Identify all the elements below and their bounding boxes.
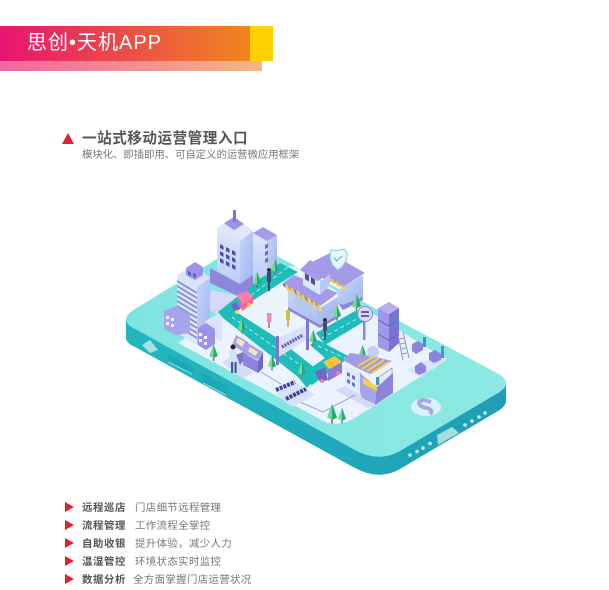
upper block: [303, 272, 320, 295]
item: humidity control: [65, 556, 221, 568]
awning stripes: [286, 285, 321, 311]
round sign: [358, 306, 372, 340]
road upper: [218, 263, 298, 318]
phone side slot left: [142, 340, 158, 353]
phone side: [126, 320, 506, 475]
item: data analysis: [65, 574, 252, 586]
road diagonal: [218, 308, 320, 388]
item: data analysis: 数据分析: [82, 575, 126, 586]
phone side recess 1: [168, 354, 194, 374]
trees: [209, 258, 366, 424]
kiosk two: [243, 343, 263, 360]
pink truck: [231, 291, 253, 314]
S logo badge: [411, 398, 441, 416]
yellow truck: [315, 356, 342, 383]
item: process management: 工作流程全掌控: [135, 521, 211, 532]
phone side port: [437, 427, 459, 445]
rear wing: [338, 275, 363, 308]
small people: [267, 268, 327, 340]
lavender plot pads: [204, 290, 378, 408]
header banner: [0, 26, 273, 71]
kiosk one: [232, 335, 248, 352]
tower building: [210, 210, 277, 296]
section heading: 一站式移动运营管理入口: [82, 131, 248, 147]
item: self checkout: 自助收银: [82, 539, 126, 550]
banner title: 思创•天机APP: [27, 32, 162, 54]
item: remote patrol: 门店细节远程管理: [135, 503, 221, 514]
striped office building: [164, 262, 222, 350]
ladder: [398, 332, 409, 360]
phone top surface: [126, 244, 506, 457]
shield badge: [330, 249, 347, 270]
conveyor and boxes: [407, 337, 447, 377]
item: process management: 流程管理: [82, 521, 126, 532]
banner yellow block: [250, 26, 273, 61]
item: remote patrol: [65, 502, 221, 514]
banner gradient bar: [0, 26, 250, 61]
feature list: [65, 502, 252, 586]
entrance arch: [276, 319, 309, 365]
banner shadow bar: [0, 61, 262, 71]
phone side slits: [168, 362, 226, 395]
item: self checkout: 提升体验，减少人力: [135, 539, 232, 550]
stacked crates tower: [378, 302, 399, 352]
printed QR panel and connectors: [261, 372, 355, 412]
person at kiosk: [229, 350, 237, 362]
item: remote patrol: 远程巡店: [82, 503, 126, 514]
lower roof band: [283, 275, 338, 306]
kiosks and person: [229, 335, 263, 373]
phone screen: [178, 266, 447, 424]
small storefront: [343, 346, 393, 405]
phone side speaker dots: [408, 411, 487, 457]
item: humidity control: 环境状态实时监控: [135, 557, 221, 568]
road cross: [298, 340, 350, 385]
roads: [218, 263, 370, 388]
tower windows: [220, 244, 236, 270]
main store with shield: [283, 249, 365, 328]
store walls: [288, 290, 338, 325]
item: data analysis: 全方面掌握门店运营状况: [133, 575, 252, 586]
road right: [316, 311, 370, 345]
phone side recess 2: [203, 373, 228, 395]
item: process management: [65, 520, 211, 532]
item: humidity control: 温湿管控: [82, 557, 126, 568]
section subheading: 模块化、即插即用、可自定义的运营微应用框架: [82, 150, 299, 161]
item: self checkout: [65, 538, 232, 550]
section marker triangle: [62, 133, 74, 144]
